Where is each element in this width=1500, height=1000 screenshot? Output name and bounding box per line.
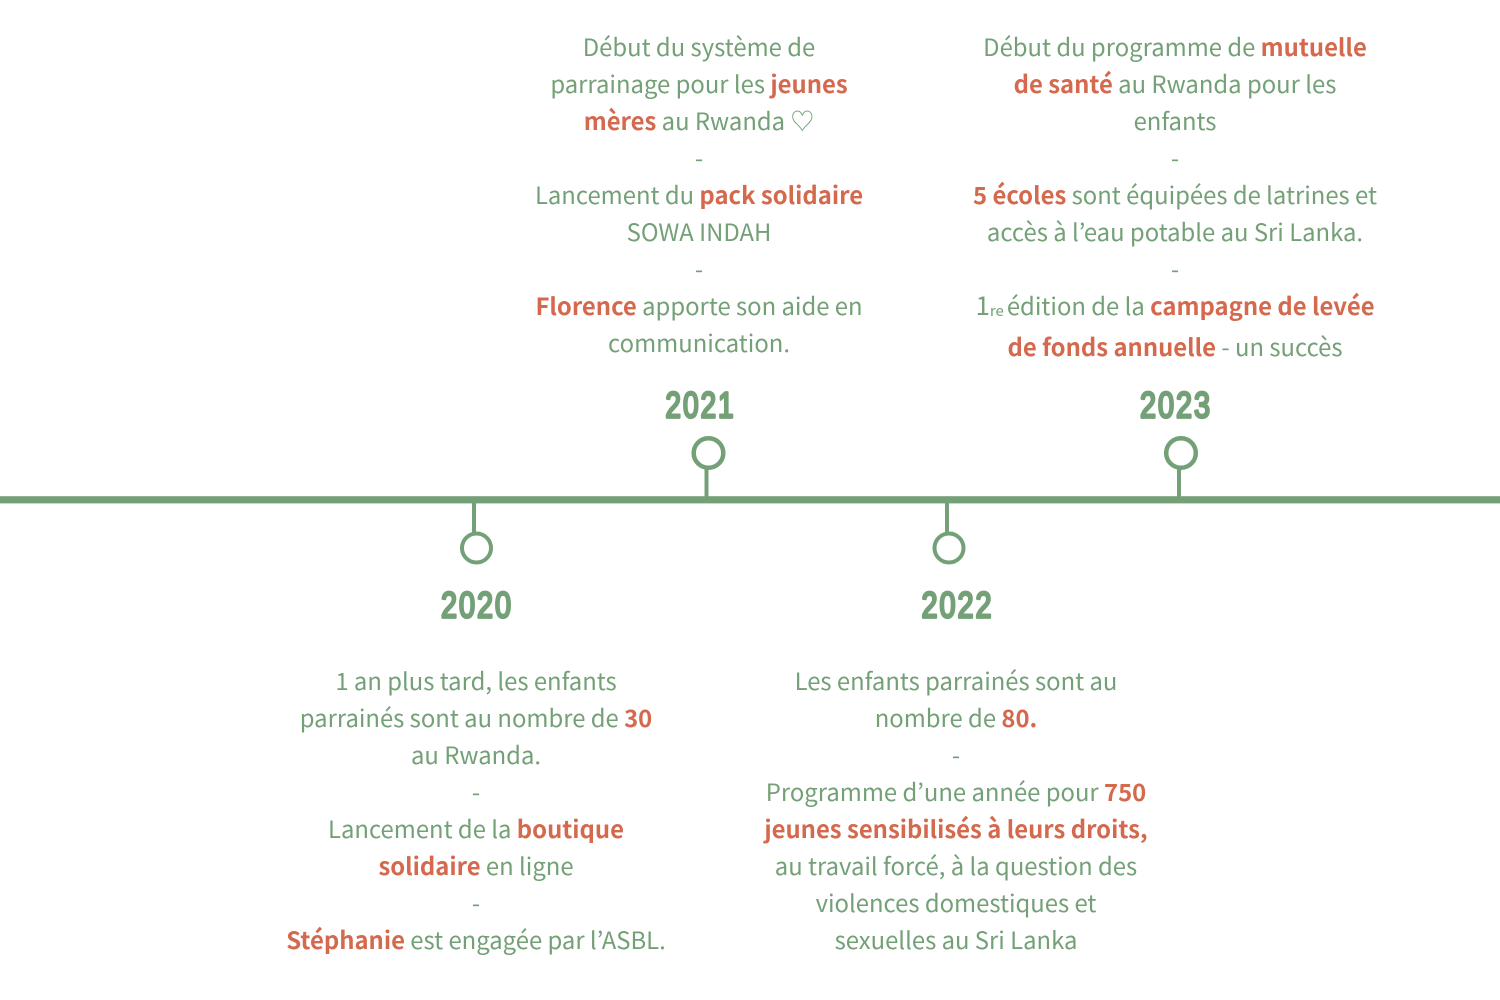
text block 2023: de santé au Rwanda pour les <box>1014 65 1336 100</box>
text block 2021: - <box>695 139 703 174</box>
text block 2021: - <box>695 250 703 285</box>
text block 2022: nombre de 80. <box>875 699 1037 734</box>
text block 2022: jeunes sensibilisés à leurs droits, <box>764 810 1148 845</box>
text block 2022: - <box>952 736 960 771</box>
text block 2022: Programme d’une année pour 750 <box>766 773 1146 808</box>
text block 2021: Lancement du pack solidaire <box>535 176 863 211</box>
text block 2020: parrainés sont au nombre de 30 <box>300 699 652 734</box>
year 2020: 2020 <box>441 584 513 625</box>
text block 2023 <box>973 28 1377 363</box>
text block 2023: 5 écoles sont équipées de latrines et <box>973 176 1377 211</box>
text block 2020: - <box>472 773 480 808</box>
text block 2023: enfants <box>1134 102 1216 137</box>
year 2021: 2021 <box>665 385 736 425</box>
text block 2020: Lancement de la boutique <box>328 810 624 845</box>
text block 2023: - <box>1171 139 1179 174</box>
text block 2023: - <box>1171 250 1179 285</box>
text block 2020: 1 an plus tard, les enfants <box>335 662 617 697</box>
text block 2020: - <box>472 884 480 919</box>
text block 2022: Les enfants parrainés sont au <box>795 662 1117 697</box>
marker 2023 <box>1166 438 1196 500</box>
text block 2021: Début du système de <box>583 28 815 63</box>
text block 2022: au travail forcé, à la question des <box>775 847 1137 882</box>
year 2023: 2023 <box>1140 384 1212 425</box>
text block 2022 <box>763 662 1148 956</box>
text block 2021 <box>535 28 863 359</box>
text block 2023: accès à l’eau potable au Sri Lanka. <box>987 213 1363 248</box>
text block 2021: parrainage pour les jeunes <box>550 65 848 100</box>
text block 2022: sexuelles au Sri Lanka <box>835 921 1077 956</box>
text block 2020: solidaire en ligne <box>378 847 574 882</box>
text block 2023: Début du programme de mutuelle <box>983 28 1367 63</box>
marker 2021 <box>694 438 723 500</box>
text block 2021: communication. <box>608 324 790 359</box>
text block 2023: 1reédition de la campagne de levée <box>975 286 1375 323</box>
text block 2020 <box>286 662 666 956</box>
text block 2021: Florence apporte son aide en <box>535 287 863 322</box>
marker 2020 <box>462 500 491 562</box>
text block 2022: violences domestiques et <box>816 884 1096 919</box>
text block 2021: mères au Rwanda ♡ <box>584 102 814 137</box>
text block 2021: SOWA INDAH <box>627 213 771 248</box>
text block 2023: de fonds annuelle - un succès <box>1007 328 1343 363</box>
text block 2020: au Rwanda. <box>411 736 541 771</box>
axis line <box>0 496 1500 503</box>
year 2022: 2022 <box>921 584 994 625</box>
marker 2022 <box>934 500 964 562</box>
text block 2020: Stéphanie est engagée par l’ASBL. <box>286 921 666 956</box>
